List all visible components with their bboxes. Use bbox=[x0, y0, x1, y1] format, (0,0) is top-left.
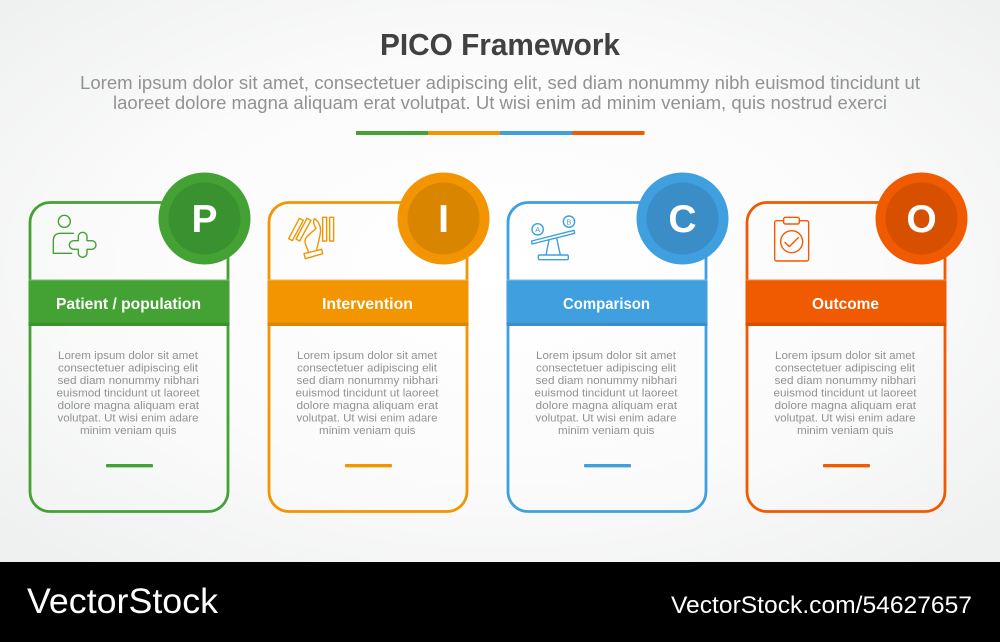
body text: patient: consectetuer adipiscing elit bbox=[58, 362, 198, 374]
header bar: patient: Patient / population bbox=[56, 296, 201, 313]
subtitle text: laoreet dolore magna aliquam erat volutpat. Ut wisi enim ad minim veniam, quis nostrud exerci bbox=[113, 93, 887, 113]
body text: comparison: volutpat. Ut wisi enim adare bbox=[536, 412, 676, 424]
body text: patient: Lorem ipsum dolor sit amet bbox=[58, 350, 198, 362]
body text: intervention: consectetuer adipiscing elit bbox=[297, 362, 437, 374]
accent dash: patient bbox=[106, 464, 153, 467]
letter badge: P: P bbox=[191, 198, 218, 241]
body text: outcome: dolore magna aliquam erat bbox=[774, 400, 916, 412]
accent dash: intervention bbox=[345, 464, 392, 467]
body text: intervention: sed diam nonummy nibhari bbox=[296, 375, 438, 387]
body text: comparison: minim veniam quis bbox=[558, 425, 655, 437]
letter badge: I bbox=[398, 172, 490, 264]
footer image id: VectorStock.com/54627657 bbox=[671, 592, 972, 619]
body text: outcome: minim veniam quis bbox=[797, 425, 894, 437]
icon: seesaw with A and B: B bbox=[567, 217, 572, 226]
header bar: comparison: Comparison bbox=[563, 296, 650, 313]
icon: hand stopping dominoes bbox=[289, 217, 334, 259]
header bar: comparison bbox=[506, 280, 708, 326]
body text: patient: minim veniam quis bbox=[80, 425, 177, 437]
body text: intervention: euismod tincidunt ut laoreet bbox=[296, 388, 438, 400]
body text: patient: volutpat. Ut wisi enim adare bbox=[58, 412, 198, 424]
body text: comparison: euismod tincidunt ut laoreet bbox=[534, 388, 678, 400]
panel: patient / population bbox=[28, 172, 250, 512]
accent dash: outcome bbox=[823, 464, 870, 467]
letter badge: C: C bbox=[668, 198, 697, 241]
header bar: outcome: Outcome bbox=[812, 296, 879, 313]
body text: intervention bbox=[296, 350, 438, 437]
body text: intervention: Lorem ipsum dolor sit amet bbox=[297, 350, 437, 362]
subtitle text bbox=[80, 73, 920, 113]
body text: outcome: Lorem ipsum dolor sit amet bbox=[775, 350, 915, 362]
panel: comparison bbox=[506, 172, 728, 512]
body text: comparison: Lorem ipsum dolor sit amet bbox=[536, 350, 676, 362]
body text: patient: dolore magna aliquam erat bbox=[58, 400, 199, 412]
letter badge: I: I bbox=[438, 198, 449, 241]
icon: clipboard with check bbox=[775, 217, 809, 261]
body text: comparison: sed diam nonummy nibhari bbox=[536, 375, 677, 387]
multicolour divider bbox=[356, 131, 644, 135]
letter badge: P bbox=[158, 172, 250, 264]
body text: intervention: dolore magna aliquam erat bbox=[296, 400, 438, 412]
body text: outcome: consectetuer adipiscing elit bbox=[775, 362, 915, 374]
body text: outcome: euismod tincidunt ut laoreet bbox=[774, 388, 916, 400]
body text: comparison: consectetuer adipiscing elit bbox=[536, 362, 676, 374]
icon: seesaw with A and B bbox=[532, 216, 575, 260]
body text: comparison bbox=[534, 350, 678, 437]
icon: seesaw with A and B: A bbox=[535, 225, 540, 234]
body text: comparison: dolore magna aliquam erat bbox=[536, 400, 677, 412]
title: PICO Framework bbox=[380, 28, 620, 62]
icon: patient with medical cross bbox=[53, 215, 96, 257]
body text: outcome bbox=[774, 350, 916, 437]
letter badge: O bbox=[876, 172, 968, 264]
header bar: outcome bbox=[746, 280, 946, 326]
letter badge: O: O bbox=[906, 198, 937, 241]
body text: intervention: volutpat. Ut wisi enim adare bbox=[296, 412, 438, 424]
header bar: patient bbox=[28, 280, 230, 326]
body text: intervention: minim veniam quis bbox=[319, 425, 416, 437]
body text: patient bbox=[56, 350, 200, 437]
letter badge: C bbox=[636, 172, 728, 264]
subtitle text: Lorem ipsum dolor sit amet, consectetuer adipiscing elit, sed diam nonummy nibh euismod tincidunt ut bbox=[80, 73, 920, 93]
footer logo text: VectorStock bbox=[27, 582, 219, 621]
panel: outcome bbox=[746, 172, 968, 512]
footer band bbox=[0, 562, 1000, 642]
accent dash: comparison bbox=[584, 464, 631, 467]
panel: intervention bbox=[268, 172, 490, 512]
body text: patient: euismod tincidunt ut laoreet bbox=[56, 388, 200, 400]
body text: patient: sed diam nonummy nibhari bbox=[58, 375, 199, 387]
body text: outcome: volutpat. Ut wisi enim adare bbox=[774, 412, 916, 424]
body text: outcome: sed diam nonummy nibhari bbox=[774, 375, 916, 387]
header bar: intervention: Intervention bbox=[322, 296, 413, 313]
header bar: intervention bbox=[268, 280, 468, 326]
